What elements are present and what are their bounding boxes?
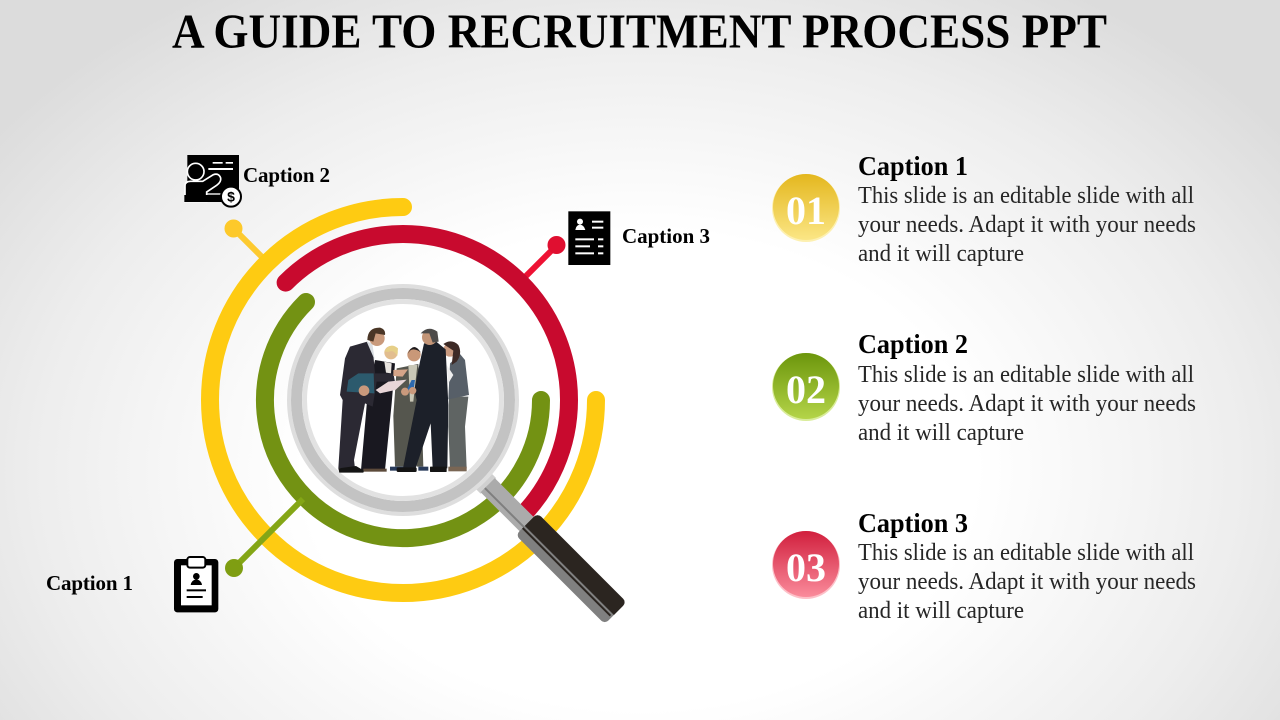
item 03 (772, 508, 1196, 624)
body 1 (858, 182, 1196, 267)
body 1: This slide is an editable slide with all (858, 182, 1194, 209)
body 3: and it will capture (858, 597, 1024, 624)
person: man at left with folder (338, 328, 408, 473)
grip (516, 513, 627, 624)
connector: caption 1 (green) (225, 499, 303, 577)
title: A GUIDE TO RECRUITMENT PROCESS PPT (172, 4, 1107, 58)
person: man in grey suit (390, 347, 428, 471)
magnifying glass handle (469, 466, 627, 624)
person: woman at right (443, 341, 469, 471)
neck (472, 470, 496, 494)
photo: business people (338, 328, 469, 473)
icon: clipboard (174, 557, 218, 612)
ring: red (286, 234, 569, 517)
person: man seen from behind (397, 329, 448, 472)
body 2: This slide is an editable slide with all (858, 361, 1194, 388)
badge 02: 02 (786, 367, 826, 412)
heading 3: Caption 3 (858, 508, 968, 538)
label: caption 1: Caption 1 (46, 571, 133, 595)
ring: yellow (210, 207, 596, 593)
folder and papers (347, 373, 415, 396)
item 02 (772, 329, 1196, 446)
badge 01: 01 (786, 188, 826, 233)
badge 01 (772, 174, 840, 242)
icon: resume (568, 211, 610, 265)
body 1: your needs. Adapt it with your needs (858, 211, 1196, 238)
badge 03 (772, 531, 840, 599)
item 01 (772, 151, 1196, 267)
body 3: This slide is an editable slide with all (858, 539, 1194, 566)
icon: presenter with dollar: $ (227, 189, 235, 205)
body 3 (858, 539, 1196, 624)
ring: green (265, 302, 541, 538)
connector: caption 3 (red) (524, 236, 566, 278)
badge 02 (772, 353, 840, 421)
connector: caption 2 (yellow) (224, 220, 264, 259)
label: caption 3: Caption 3 (622, 224, 710, 248)
body 2 (858, 361, 1196, 446)
icon: presenter with dollar (184, 155, 241, 207)
body 1: and it will capture (858, 240, 1024, 267)
magnifying glass lens (289, 286, 517, 514)
body 3: your needs. Adapt it with your needs (858, 568, 1196, 595)
badge 03: 03 (786, 545, 826, 590)
body 2: your needs. Adapt it with your needs (858, 390, 1196, 417)
person: blonde woman (361, 346, 398, 472)
heading 2: Caption 2 (858, 329, 968, 359)
body 2: and it will capture (858, 419, 1024, 446)
heading 1: Caption 1 (858, 151, 968, 181)
label: caption 2: Caption 2 (243, 163, 330, 187)
